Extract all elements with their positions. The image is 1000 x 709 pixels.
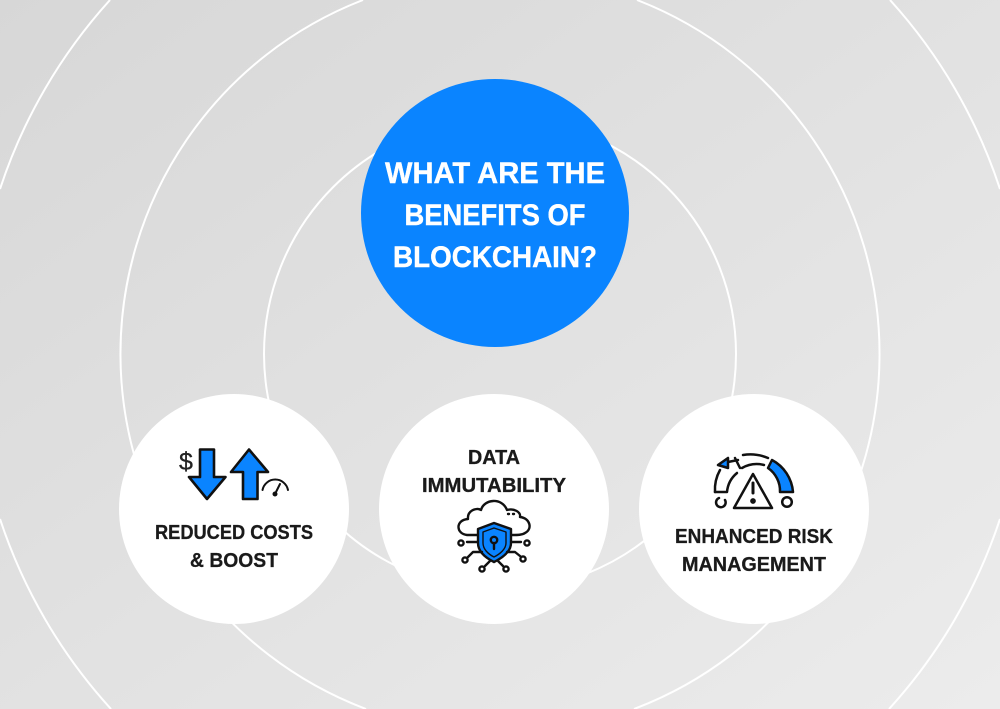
label: REDUCED COSTS — [155, 522, 313, 544]
panel: reduced costs — [119, 394, 349, 624]
panel: enhanced risk management — [639, 394, 869, 624]
label — [155, 522, 313, 572]
panel: data immutability — [379, 394, 609, 624]
icon: cost down, boost up arrows — [189, 450, 288, 499]
label: & BOOST — [190, 550, 278, 572]
label: ENHANCED RISK — [675, 526, 834, 548]
title: BLOCKCHAIN? — [393, 241, 597, 274]
icon: risk gauge with warning triangle — [715, 454, 793, 508]
label: MANAGEMENT — [682, 554, 826, 576]
label: IMMUTABILITY — [422, 475, 567, 497]
panel: central question — [361, 79, 629, 347]
icon: dollar sign: $ — [179, 448, 193, 476]
label: DATA — [468, 447, 520, 469]
icon: cloud shield with circuits — [458, 501, 530, 572]
label — [675, 526, 834, 576]
title — [385, 157, 605, 274]
title: WHAT ARE THE — [385, 157, 605, 190]
label — [422, 447, 567, 497]
title: BENEFITS OF — [404, 199, 586, 232]
